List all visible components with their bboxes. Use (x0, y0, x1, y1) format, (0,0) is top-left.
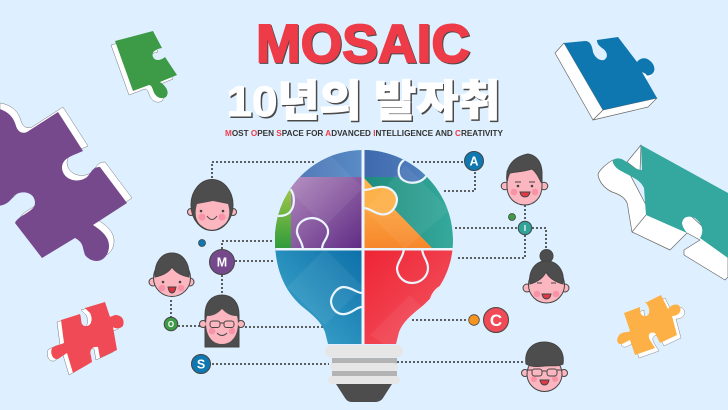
dotted connectors (171, 162, 546, 364)
bulb base (325, 345, 403, 358)
node: C (484, 308, 508, 332)
puzzle piece: blue (555, 37, 657, 120)
face: woman with glasses (200, 295, 244, 347)
heading: Korean subtitle: 10년의 발자취 (226, 78, 500, 126)
accent dots (198, 214, 516, 325)
puzzle piece: teal (598, 145, 728, 280)
node: A (464, 152, 484, 170)
heading: MOSAIC: MOSAIC (257, 15, 471, 75)
face: man with glasses (522, 342, 568, 392)
node: S: S (197, 358, 205, 372)
node: O (164, 317, 178, 331)
node: S (192, 354, 210, 374)
puzzle piece: red (47, 302, 124, 375)
diamond facets (288, 156, 448, 344)
node: O: O (168, 320, 174, 329)
node: M (210, 250, 234, 274)
node: I: I (524, 224, 526, 233)
bulb puzzle glass (275, 150, 453, 344)
heading: MOSAIC: MOSAIC (256, 14, 470, 74)
tagline: MOST OPEN SPACE FOR ADVANCED INTELLIGENCE AND CREATIVITY (225, 128, 503, 138)
face: woman left (149, 253, 194, 296)
node: C: C (490, 311, 502, 330)
puzzle piece: orange (617, 295, 685, 358)
heading: Korean subtitle: 10년의 발자취 (228, 80, 502, 128)
node: I (518, 221, 532, 235)
puzzle piece: purple (0, 103, 132, 261)
puzzle piece: green (111, 31, 177, 102)
face: woman with bun (523, 250, 569, 303)
light bulb (270, 145, 458, 402)
node: A: A (469, 154, 479, 168)
title (225, 14, 503, 138)
face: man top right (501, 154, 548, 205)
puzzle seam lines (276, 160, 440, 314)
node: M: M (217, 256, 227, 270)
face: woman top left (188, 180, 236, 230)
